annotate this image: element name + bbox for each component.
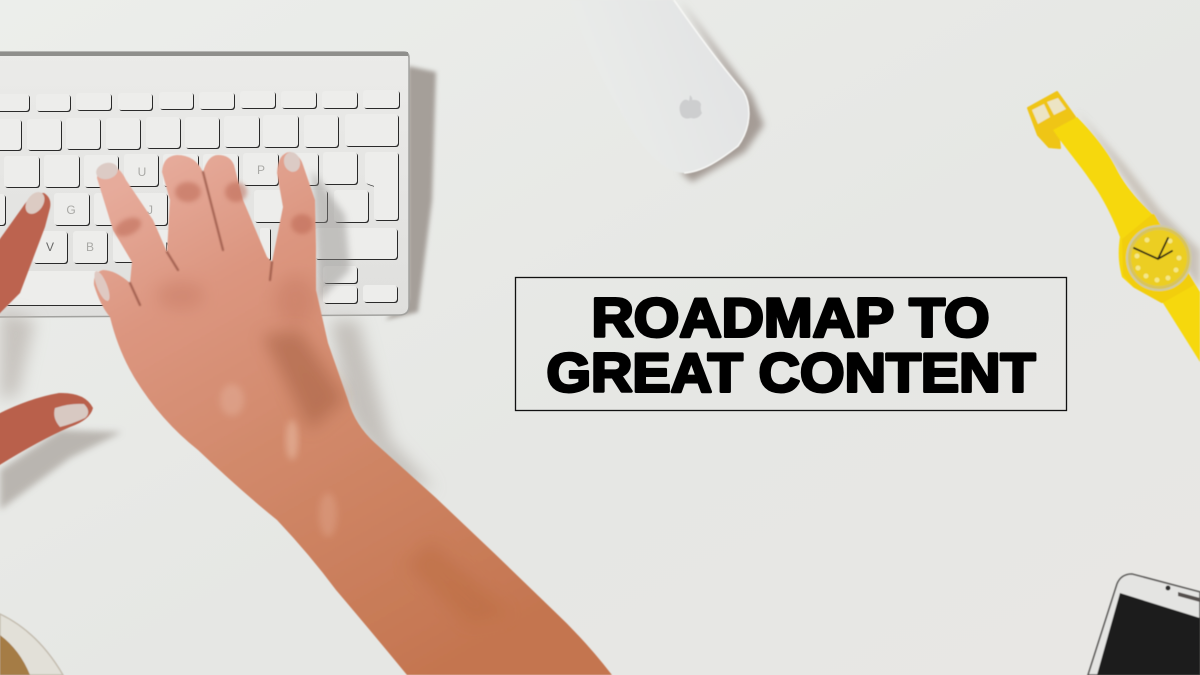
title border	[516, 278, 1066, 410]
hand shadow on keyboard	[312, 170, 350, 300]
hand blotches	[156, 276, 315, 324]
left thumb nail	[54, 404, 88, 427]
phone screen	[1097, 593, 1200, 675]
left finger nail	[22, 189, 48, 217]
right hand and arm	[91, 150, 612, 675]
key glyphs: M	[165, 240, 175, 254]
knuckle marks	[112, 182, 313, 240]
keyboard	[0, 52, 409, 317]
key glyphs: G	[66, 203, 76, 217]
mouse rim	[674, 0, 749, 173]
phone camera	[1166, 586, 1170, 590]
title text: GREAT CONTENT	[546, 342, 1036, 404]
glass rim	[0, 614, 63, 675]
title text: ROADMAP TO	[592, 286, 990, 348]
apple logo	[680, 95, 702, 119]
watch face	[1127, 226, 1191, 290]
watch	[1028, 92, 1200, 362]
watch buckle	[1028, 92, 1075, 148]
keyboard body	[0, 52, 409, 317]
phone	[1088, 574, 1200, 675]
watch case	[1124, 216, 1192, 301]
wrist highlight	[220, 384, 244, 416]
thumb shadow	[0, 430, 122, 510]
title box	[516, 278, 1066, 410]
key glyphs: B	[86, 240, 94, 254]
left thumb	[0, 393, 93, 466]
hand and forearm outline	[94, 152, 612, 675]
forearm highlight	[319, 493, 337, 537]
left hand shadow	[0, 310, 35, 400]
keyboard shadow	[385, 66, 436, 320]
key glyphs	[46, 163, 265, 254]
phone body	[1088, 574, 1200, 675]
keyboard top edge	[0, 52, 408, 56]
finger creases	[130, 172, 272, 305]
key glyphs: P	[257, 163, 265, 177]
forearm tan	[405, 540, 510, 625]
arm shadow	[330, 320, 435, 490]
glass contents	[0, 635, 30, 675]
keyboard keys	[0, 90, 399, 305]
thumb nail	[91, 269, 113, 303]
key glyphs: U	[138, 165, 146, 179]
phone speaker	[1178, 592, 1200, 602]
mouse body	[570, 0, 749, 173]
left hand	[0, 189, 93, 466]
mouse shadow	[680, 0, 764, 182]
finger nails	[94, 150, 302, 182]
left finger	[0, 193, 50, 316]
watch strap	[1053, 117, 1200, 362]
mouse	[570, 0, 749, 173]
watch hands	[1134, 238, 1172, 259]
vein highlight	[286, 420, 298, 460]
glass at corner	[0, 614, 63, 675]
key glyphs: V	[46, 240, 54, 254]
key glyphs: J	[147, 203, 153, 217]
hand vein shadow	[262, 330, 345, 430]
watch markers	[1134, 238, 1182, 282]
watch shadow	[1077, 110, 1200, 290]
